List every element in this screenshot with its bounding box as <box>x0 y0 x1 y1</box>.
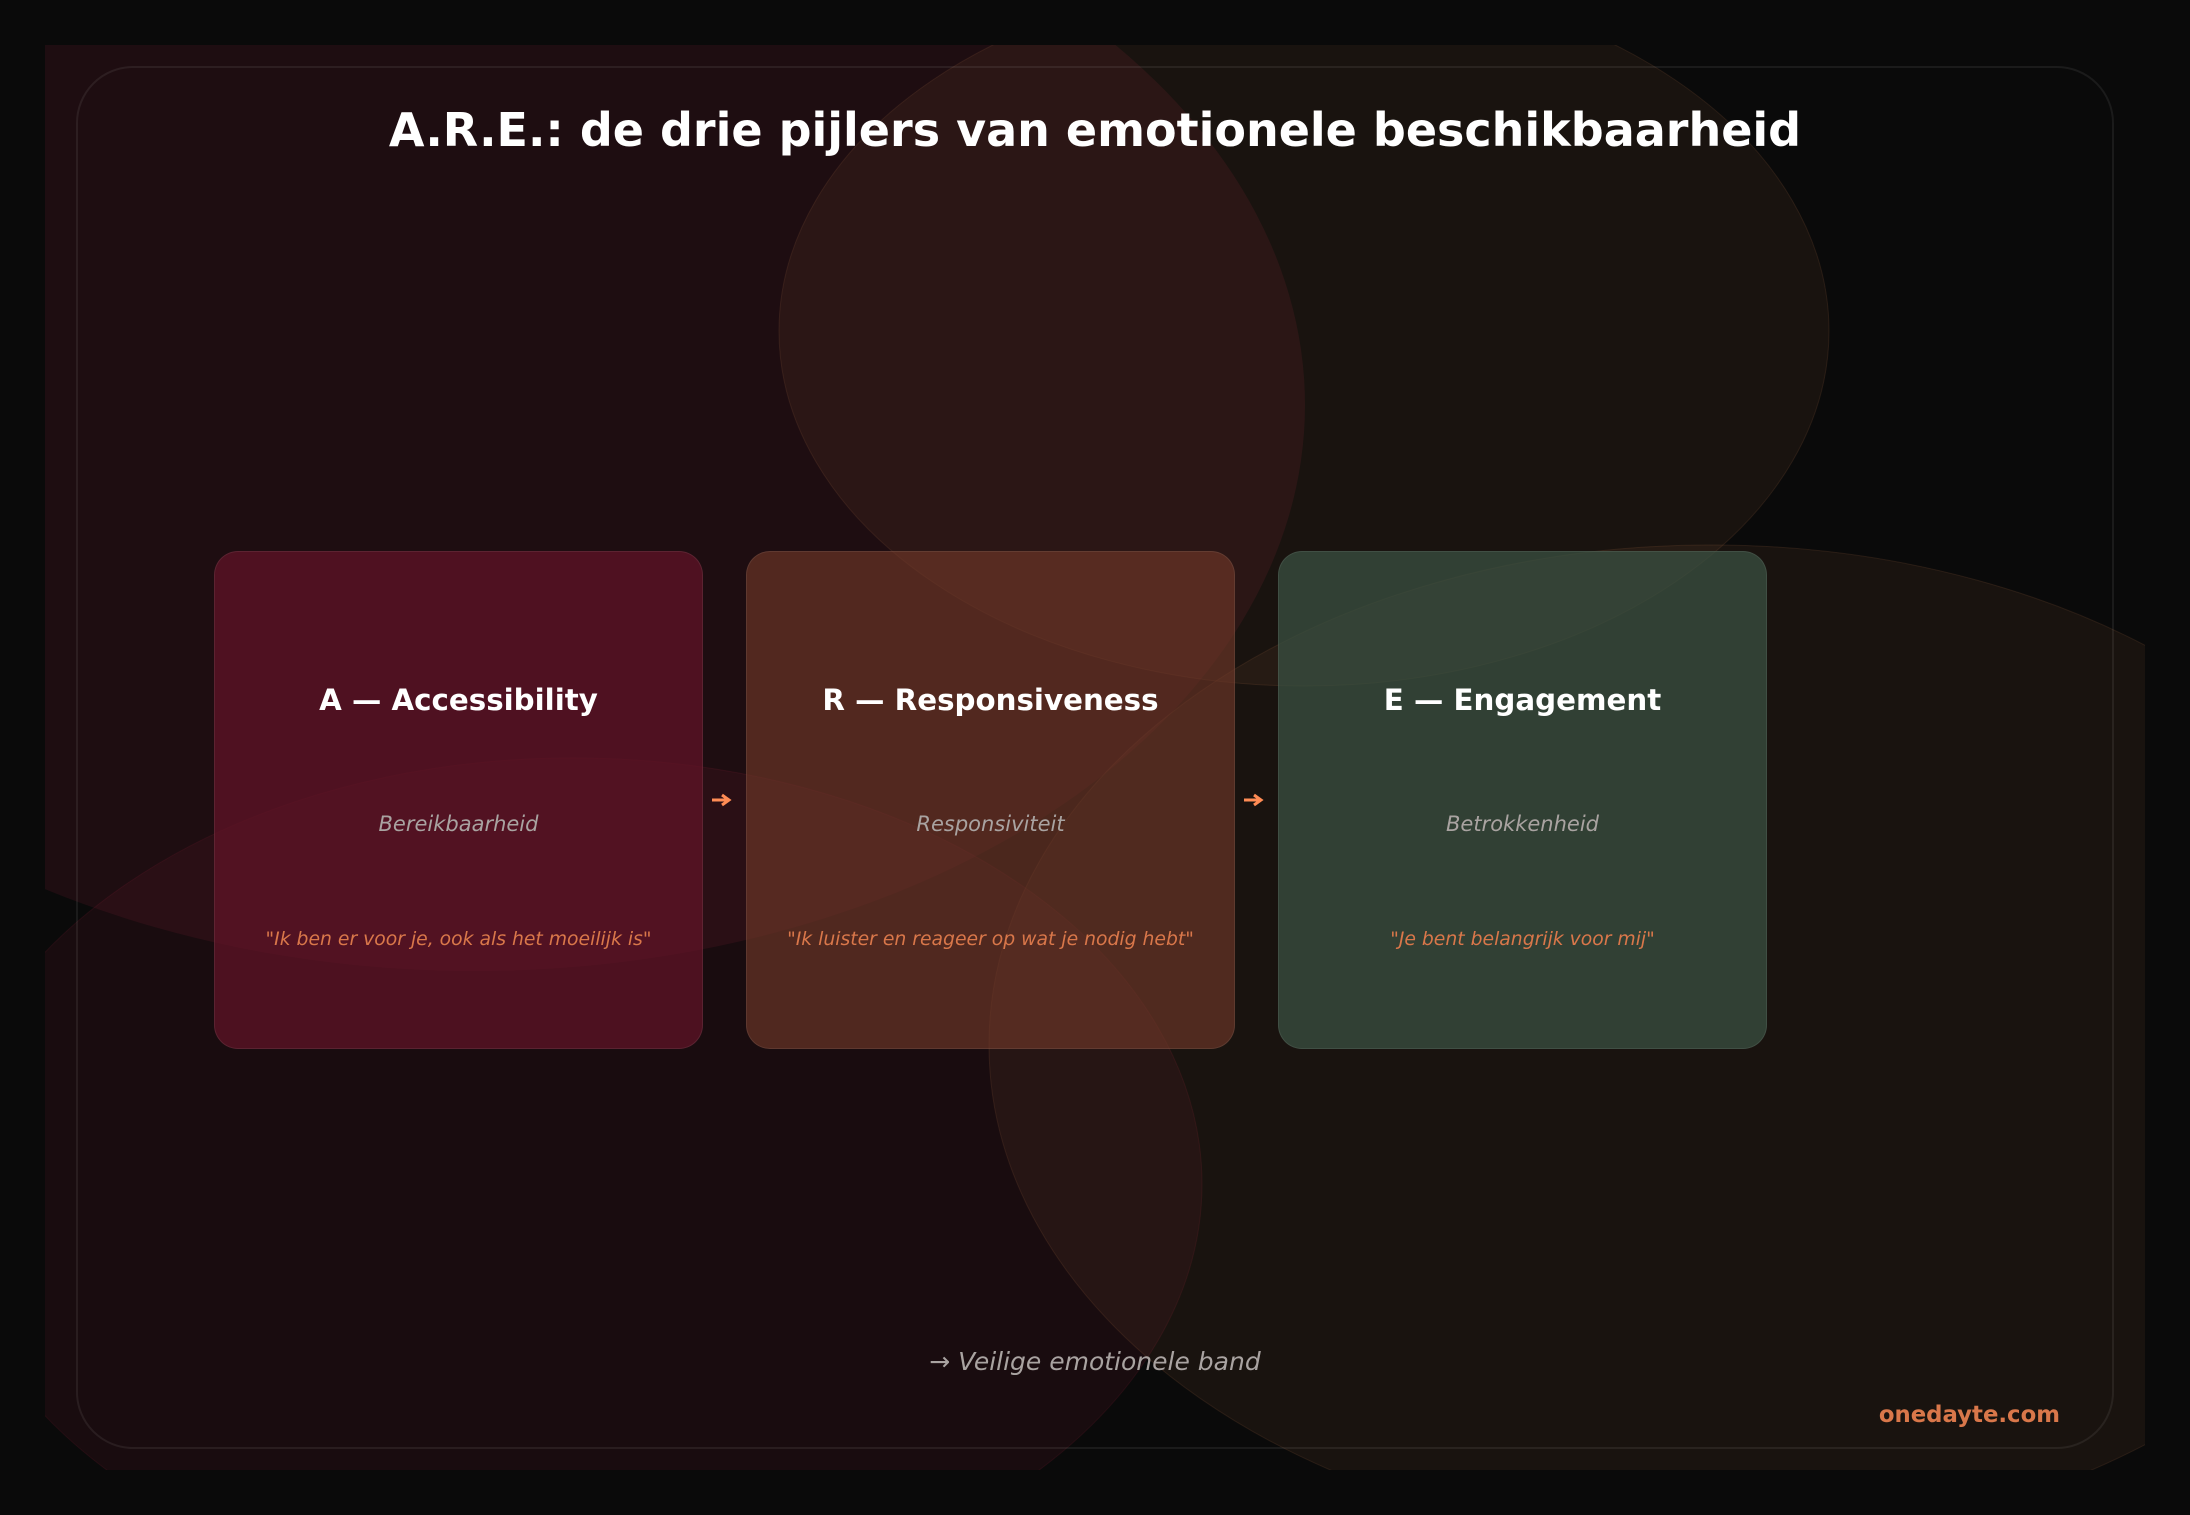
brand: onedayte.com <box>1879 1402 2060 1428</box>
card: Engagement: E — Engagement <box>1384 683 1661 717</box>
arrow 2 <box>1244 794 1264 806</box>
arrow 1 <box>712 794 732 806</box>
card: Responsiveness: "Ik luister en reageer op wat je nodig hebt" <box>787 929 1194 950</box>
footer text: → Veilige emotionele band <box>929 1347 1261 1376</box>
card: Accessibility <box>214 551 703 1049</box>
card: Engagement: "Je bent belangrijk voor mij" <box>1390 929 1655 950</box>
card: Accessibility: A — Accessibility <box>319 683 598 717</box>
card: Engagement: Betrokkenheid <box>1446 812 1599 836</box>
card: Accessibility: Bereikbaarheid <box>378 812 538 836</box>
card: Accessibility: "Ik ben er voor je, ook als het moeilijk is" <box>266 929 651 950</box>
card: Responsiveness: Responsiviteit <box>916 812 1065 836</box>
card: Engagement <box>1278 551 1767 1049</box>
title: A.R.E.: de drie pijlers van emotionele beschikbaarheid <box>389 103 1801 157</box>
card: Responsiveness <box>746 551 1235 1049</box>
card: Responsiveness: R — Responsiveness <box>822 683 1159 717</box>
